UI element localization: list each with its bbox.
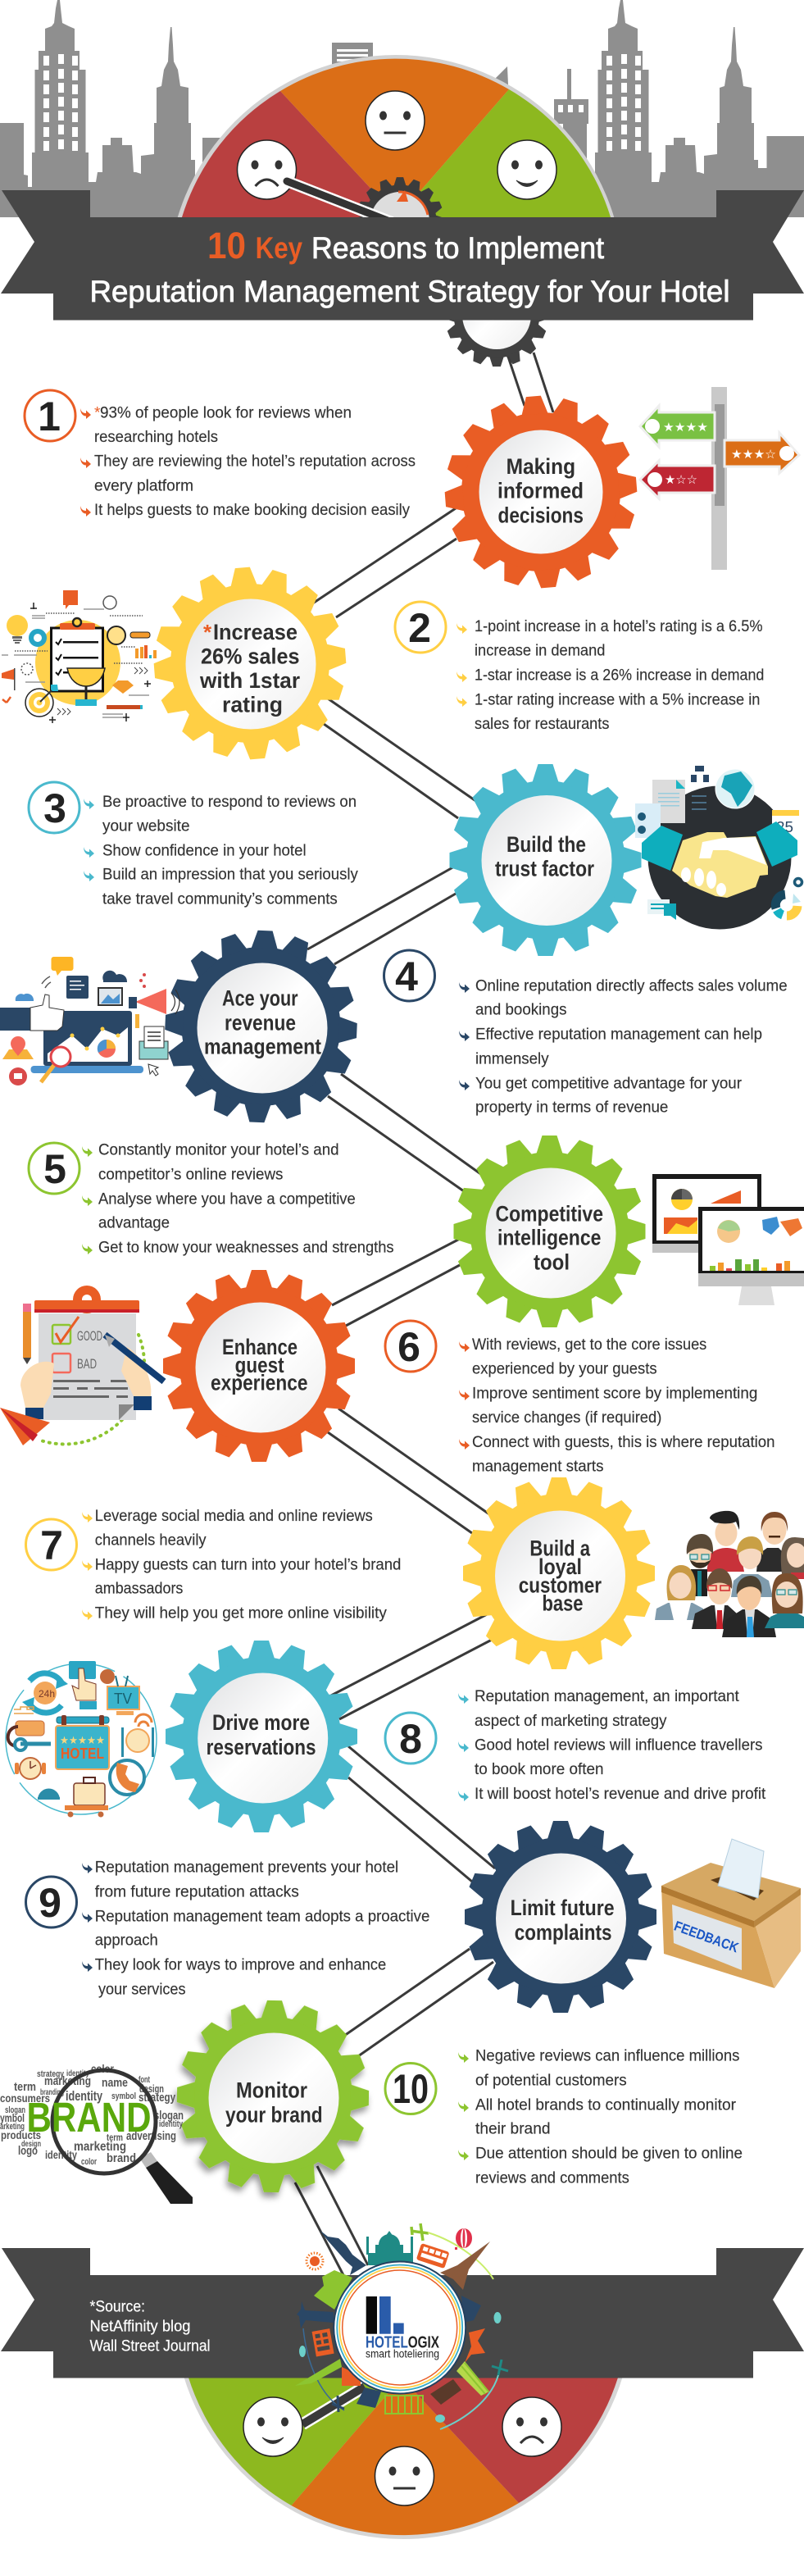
gear 1: Making informed decisions: decisions [498,503,584,528]
gear 9: Limit future complaints: Limit future [511,1896,615,1920]
gear 2: Increase 26% sales with 1star rating: rating [222,692,283,717]
block 6: With reviews, get to the core issues [472,1336,707,1354]
number badge 8 [385,1713,436,1764]
eiffel tower [440,2241,490,2290]
block 9: Reputation management prevents your hotel [95,1858,398,1876]
gear 1: Making informed decisions: Making [506,454,575,479]
gear 4: Ace your revenue management: management [204,1035,321,1059]
icon: revenue laptop illustration [0,957,179,1085]
block 10: their brand [475,2120,551,2138]
front row: man with red glasses [692,1568,740,1629]
block 2: sales for restaurants [475,715,610,733]
Hotelogix logo: HOTELOGIX [366,2333,439,2351]
block 7: Happy guests can turn into your hotel’s brand [95,1555,401,1573]
icon: feedback box: FEEDBACK [672,1918,741,1956]
tower of pisa [457,2361,489,2396]
number badge 4 [384,950,434,1001]
block 6: Improve sentiment score by implementing [472,1385,757,1403]
icon: analytics monitors [652,1174,804,1305]
block 8: aspect of marketing strategy [475,1712,667,1730]
icon: brand word cloud with magnifier: identity [45,2148,77,2161]
flight path and plane [303,2328,344,2412]
block 6 [385,1321,775,1476]
icon: brand word cloud with magnifier: design [21,2140,41,2149]
sun [307,2253,323,2269]
source text: Wall Street Journal [90,2337,210,2355]
number badge 2: 2 [408,605,431,651]
gear 7: Build a loyal customer base: customer [519,1573,602,1598]
icon: good/bad clipboard: GOOD [77,1328,102,1344]
gear 3: Build the trust factor: Build the [506,832,586,857]
icon: brand word cloud with magnifier: identity [66,2069,89,2078]
source text: NetAffinity blog [90,2318,190,2335]
block 2: increase in demand [475,641,605,659]
city skyline [0,0,804,217]
icon: hotel services circle: 24h [39,1688,55,1700]
bottom reputation gauge [184,2378,623,2539]
block 1: They are reviewing the hotel’s reputation across [94,453,416,471]
travel landmarks around logo [295,2223,508,2429]
gear 2: Increase 26% sales with 1star rating: with 1star [199,668,300,693]
icon: brand word cloud with magnifier: term [14,2080,36,2094]
gear 10: Monitor your brand [175,1999,370,2194]
gauge hub gear [358,177,443,217]
bottom navy building [357,2387,381,2408]
block 10: Negative reviews can influence millions [475,2046,740,2064]
back row: man with quiff [706,1511,744,1572]
face: sad [238,140,297,199]
block 1: researching hotels [94,428,218,446]
icon: brand word cloud with magnifier: ymbol [0,2111,25,2124]
icon: brand word cloud with magnifier: slogan [5,2105,25,2115]
block 8: Good hotel reviews will influence travellers [475,1736,763,1754]
gear 1: Making informed decisions [438,389,644,595]
right navy building [461,2296,481,2323]
number badge 1: 1 [38,394,61,439]
block 5: Get to know your weaknesses and strengths [98,1239,394,1257]
block 1 [25,390,416,519]
icon: brand word cloud with magnifier: branding [40,2088,64,2097]
gear 8: Drive more reservations: Drive more [212,1710,310,1735]
gear 5: Competitive intelligence tool: Competitive [495,1201,603,1226]
gear 2: Increase 26% sales with 1star rating: Increase [213,620,298,644]
icon: brand word cloud with magnifier: products [1,2128,41,2141]
block 5: advantage [98,1214,170,1232]
clouds [299,2312,502,2423]
back row: man with moustache [756,1512,788,1572]
gear 3: Build the trust factor: trust factor [495,856,594,881]
block 3 [29,782,358,908]
title line 2: Reputation Management Strategy for Your Hotel [90,275,729,308]
middle row: bearded man [687,1534,713,1596]
block 5: Analyse where you have a competitive [98,1190,356,1208]
block 3: Show confidence in your hotel [102,841,307,859]
icon: brand word cloud with magnifier: strategy [37,2069,65,2079]
icon: brand word cloud with magnifier: consumers [0,2091,50,2105]
gear 10: Monitor your brand: Monitor [236,2078,307,2102]
title line 1: Reasons to Implement [311,231,605,265]
number badge 9: 9 [39,1880,61,1926]
block 9: approach [95,1932,158,1950]
block 3: Build an impression that you seriously [102,866,358,884]
gear 6: Enhance guest experience: experience [211,1371,308,1395]
gear 5: Competitive intelligence tool: intelligence [497,1226,601,1250]
block 3: take travel community’s comments [102,890,338,908]
block 10: of potential customers [475,2071,627,2089]
block 8: to book more often [475,1760,603,1778]
Hotelogix logo: smart hoteliering [366,2348,439,2360]
gear 5: Competitive intelligence tool: tool [534,1249,570,1274]
middle row: blond man [731,1536,773,1597]
top reputation gauge [177,55,615,217]
block 8: It will boost hotel’s revenue and drive profit [475,1785,766,1803]
icon: brand word cloud with magnifier: color [81,2157,97,2167]
teal plane and arc [440,2360,508,2429]
number badge 6 [385,1321,436,1372]
icon: hotel services circle: ★★★★★ [60,1734,105,1746]
block 9: They look for ways to improve and enhance [95,1956,386,1974]
title line 1 [207,225,605,266]
gear 2: Increase 26% sales with 1star rating [147,560,353,767]
icon: brand word cloud with magnifier: color [91,2062,114,2075]
icon: group of people [655,1511,804,1637]
icon: brand word cloud with magnifier: name [102,2076,128,2090]
icon: brand word cloud with magnifier: design [139,2082,164,2095]
icon: hotel services circle [6,1661,157,1817]
icon: review signpost: ★★★★ [663,421,708,435]
block 10: All hotel brands to continually monitor [475,2096,736,2114]
block 1: * [94,404,101,421]
block 1: It helps guests to make booking decision easily [94,501,410,519]
block 4 [384,950,788,1117]
front row: man with blue tie [722,1576,776,1637]
gear 2: Increase 26% sales with 1star rating: 26% sales [201,644,300,668]
block 3: Be proactive to respond to reviews on [102,793,357,811]
icon: feedback box [661,1839,801,1988]
source text [90,2298,210,2355]
icon: brand word cloud with magnifier: slogan [154,2109,184,2123]
icon: hotel services circle: HOTEL [61,1745,104,1762]
icon: brand word cloud with magnifier: term [107,2132,123,2143]
magnifier [52,2070,193,2204]
block 1: 93% of people look for reviews when [100,403,352,421]
block 7 [26,1507,401,1623]
block 7: They will help you get more online visibility [95,1604,387,1623]
number badge 6: 6 [397,1324,420,1370]
block 4: You get competitive advantage for your [475,1074,742,1092]
number badge 4: 4 [395,953,418,999]
orange ship [342,2367,361,2386]
gear 7: Build a loyal customer base: Build a [529,1536,590,1561]
icon: brand word cloud with magnifier [0,2062,193,2204]
icon: brand word cloud with magnifier: font [139,2075,150,2085]
middle row: woman [781,1537,804,1579]
bottom gauge needle [302,2387,365,2424]
face: happy [497,140,556,199]
number badge 9 [26,1877,77,1927]
icon: brand word cloud with magnifier: identity [66,2088,102,2104]
front row: woman with blond bob [655,1565,705,1620]
icon: brand word cloud with magnifier: brand [107,2151,136,2165]
block 5: competitor’s online reviews [98,1165,284,1183]
gauge needle [287,181,392,222]
icon: good/bad clipboard [0,1286,164,1445]
gear 7: Build a loyal customer base [463,1477,655,1669]
icon: review signpost: ★☆☆ [665,473,697,487]
icon: handshake illustration: 25 [776,819,793,835]
block 7: ambassadors [95,1580,184,1598]
icon: handshake illustration [635,766,802,930]
block 10: Due attention should be given to online [475,2144,743,2162]
block 2: 1-point increase in a hotel’s rating is a 6.5% [475,617,762,635]
block 4: property in terms of revenue [475,1099,668,1117]
number badge 8: 8 [399,1716,422,1762]
front row: woman with teal top [765,1573,804,1628]
icon: brand word cloud with magnifier: advertising [126,2129,176,2143]
icon: good/bad clipboard: BAD [77,1356,97,1372]
gear 8: Drive more reservations: reservations [207,1735,316,1759]
block 10 [385,2046,743,2187]
block 4: Effective reputation management can help [475,1026,762,1044]
icon: brand word cloud with magnifier: BRAND [26,2094,151,2141]
icon: brand word cloud with magnifier: marketing [74,2140,126,2154]
block 6: management starts [472,1458,604,1476]
block 7: Leverage social media and online reviews [95,1507,373,1525]
gear 4: Ace your revenue management [161,926,361,1126]
Hotelogix logo [334,2261,466,2394]
number badge 7 [26,1519,77,1570]
number badge 10: 10 [393,2066,429,2112]
block 3: your website [102,817,190,835]
block 2: 1-star increase is a 26% increase in demand [475,666,764,684]
number badge 2 [395,602,446,653]
christ statue [297,2301,334,2328]
source banner [1,2248,804,2378]
icon: checklist illustration [2,590,157,723]
block 10: reviews and comments [475,2169,629,2187]
taj mahal [366,2231,413,2265]
opera house [465,2328,485,2363]
block 2: 1-star rating increase with a 5% increase in [475,690,760,708]
block 9: your services [98,1980,186,1998]
block 6: service changes (if required) [472,1409,661,1427]
gear 1: Making informed decisions: informed [497,479,584,503]
icon: review signpost [640,387,799,570]
number badge 3 [29,782,79,833]
statue of liberty [320,2230,366,2275]
block 4: and bookings [475,1001,567,1019]
number badge 5 [29,1143,79,1194]
block 7: channels heavily [95,1531,207,1549]
icon: brand word cloud with magnifier: arketing [0,2122,25,2132]
face: neutral [375,2446,434,2505]
face: happy [243,2397,302,2456]
block 4: Online reputation directly affects sales volume [475,976,788,994]
block 4: immensely [475,1049,549,1067]
title banner [1,190,804,320]
gear 4: Ace your revenue management: revenue [225,1011,296,1035]
connecting rods [295,353,553,2275]
title line 1: Key [256,231,302,265]
face: neutral [366,91,425,150]
gear 9: Limit future complaints: complaints [515,1920,611,1945]
gear 6: Enhance guest experience [163,1270,355,1462]
block 2 [395,602,764,733]
gear 7: Build a loyal customer base: loyal [538,1554,582,1579]
number badge 3: 3 [43,785,66,831]
gear 4: Ace your revenue management: Ace your [222,986,298,1011]
bottom green market [385,2396,423,2414]
block 9 [26,1858,429,1998]
gear 7: Build a loyal customer base: base [543,1591,584,1615]
block 9: from future reputation attacks [95,1882,299,1900]
gear 8: Drive more reservations [166,1641,357,1832]
block 8 [385,1687,766,1803]
block 1: every platform [94,476,193,494]
gear 2: Increase 26% sales with 1star rating: * [203,620,212,644]
block 9: Reputation management team adopts a proactive [95,1907,429,1925]
face: sad [502,2397,561,2456]
block 6: experienced by your guests [472,1360,657,1378]
gear 10: Monitor your brand: your brand [225,2102,323,2127]
brown bus [430,2379,461,2405]
hot air balloon [455,2228,472,2250]
icon: brand word cloud with magnifier: logo [18,2144,38,2158]
source text: *Source: [90,2298,145,2315]
gear 3: Build the trust factor [449,764,641,956]
icon: brand word cloud with magnifier: symbol [111,2091,136,2101]
gear 6: Enhance guest experience: guest [235,1353,284,1377]
icon: review signpost: ★★★☆ [731,448,776,462]
block 6: Connect with guests, this is where reputation [472,1433,775,1451]
number badge 7: 7 [40,1522,63,1568]
gear 9: Limit future complaints [465,1821,656,2013]
block 5 [29,1140,394,1257]
brandenburg gate [314,2270,352,2310]
icon: brand word cloud with magnifier: strategy [139,2091,176,2105]
block 8: Reputation management, an important [475,1687,739,1705]
green plane and arc [411,2223,429,2241]
number badge 1 [25,390,75,441]
gear 5: Competitive intelligence tool [454,1136,646,1327]
icon: brand word cloud with magnifier: identity [159,2119,184,2129]
title line 1: 10 [207,225,246,266]
number badge 5: 5 [43,1146,66,1192]
top dark gear behind banner [445,263,548,366]
block 5: Constantly monitor your hotel’s and [98,1140,339,1158]
gear 6: Enhance guest experience: Enhance [222,1335,298,1359]
icon: brand word cloud with magnifier: marketing [44,2074,91,2088]
rocket [295,2359,342,2386]
orange bus [312,2328,334,2356]
icon: hotel services circle: TV [114,1691,132,1707]
double decker bus [416,2243,450,2269]
